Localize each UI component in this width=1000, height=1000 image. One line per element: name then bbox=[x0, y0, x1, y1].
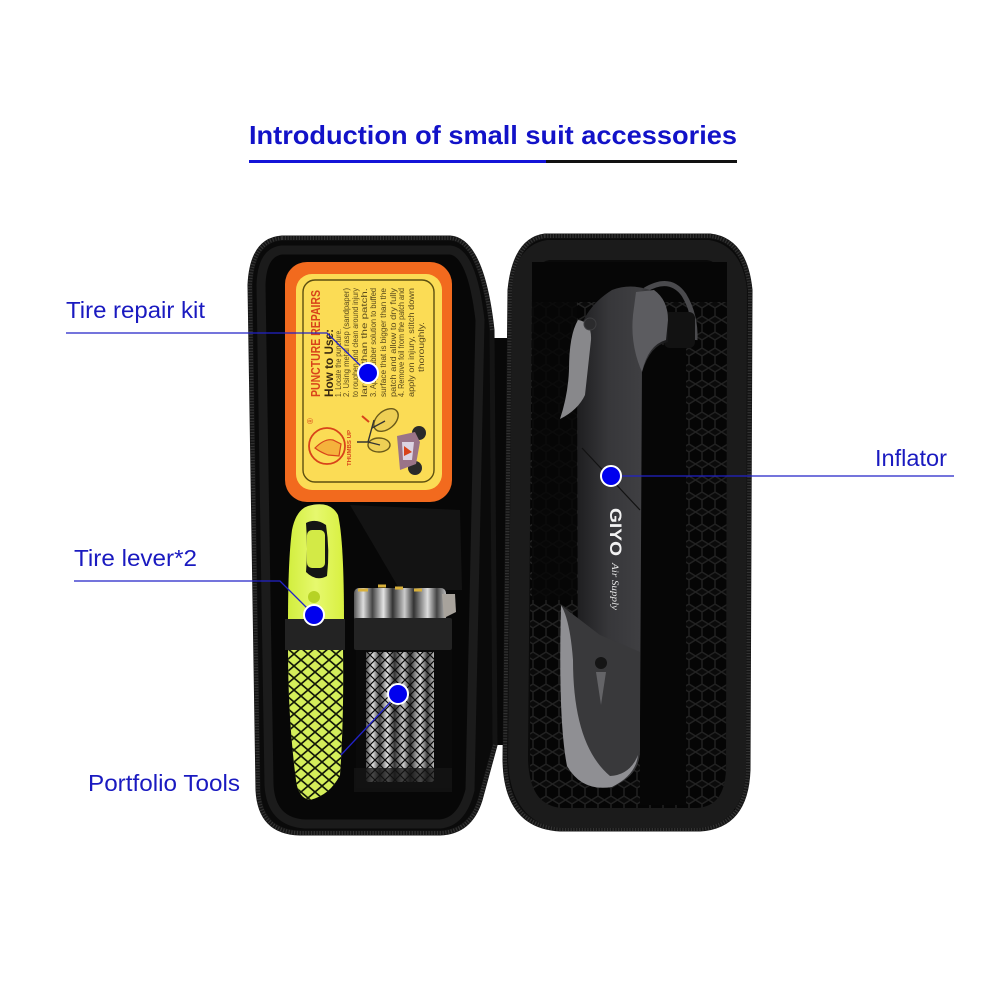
portfolio tools bbox=[354, 586, 456, 792]
case left half bbox=[250, 238, 495, 833]
repair instructions: larger than the patch. bbox=[360, 288, 369, 397]
callout: inflator bbox=[601, 445, 954, 486]
pump brand: GIYO bbox=[606, 508, 625, 556]
repair instructions: 2. Using metal rasp (sandpaper) bbox=[342, 288, 351, 397]
icon: bicycle bbox=[357, 404, 403, 452]
icon: thumbs up logo bbox=[306, 418, 353, 466]
case spine bbox=[486, 338, 512, 745]
repair instructions: thoroughly. bbox=[417, 322, 426, 372]
callout: portfolio tools: Portfolio Tools bbox=[88, 770, 240, 796]
icon: thumbs up logo: THUMBS UP bbox=[347, 430, 353, 466]
icon: thumbs up logo: ® bbox=[306, 418, 315, 424]
repair instructions: 3. Apply rubber solution to buffed bbox=[369, 288, 378, 397]
callout: inflator: Inflator bbox=[875, 445, 947, 471]
repair instructions: apply on injury, stitch down bbox=[407, 288, 416, 397]
callout: tire repair kit: Tire repair kit bbox=[66, 297, 206, 323]
pump hose bbox=[645, 284, 695, 340]
inflator pump bbox=[560, 284, 695, 788]
repair instructions: 1. Locate the puncture. bbox=[334, 329, 343, 397]
pump knob bbox=[664, 312, 695, 348]
inflator pump: Air Supply bbox=[610, 562, 620, 610]
pump handle bbox=[562, 606, 640, 786]
tire levers bbox=[285, 504, 345, 800]
repair instructions: to roughen and clean around injury bbox=[351, 288, 360, 397]
pump lever bbox=[560, 320, 591, 419]
callout: tire lever bbox=[74, 545, 324, 625]
icon: motorcycle bbox=[397, 426, 426, 475]
how to use heading: How to Use: bbox=[322, 329, 336, 397]
repair instructions: surface that is bigger than the bbox=[379, 287, 388, 397]
pump head bbox=[577, 286, 668, 720]
repair kit box bbox=[285, 262, 452, 502]
callout: portfolio tools bbox=[88, 684, 408, 796]
callout: tire repair kit bbox=[66, 297, 378, 383]
callout: tire lever: Tire lever*2 bbox=[74, 545, 197, 571]
repair instructions: patch and allow to dry fully bbox=[389, 288, 398, 397]
title bbox=[249, 120, 737, 163]
open zip case bbox=[250, 236, 750, 833]
repair instructions: 4. Remove foil from the patch and bbox=[397, 288, 406, 397]
repair instructions bbox=[334, 287, 426, 397]
title: Introduction of small suit accessories bbox=[249, 120, 737, 150]
repair kit heading: PUNCTURE REPAIRS bbox=[308, 290, 323, 397]
case right half bbox=[505, 236, 750, 829]
